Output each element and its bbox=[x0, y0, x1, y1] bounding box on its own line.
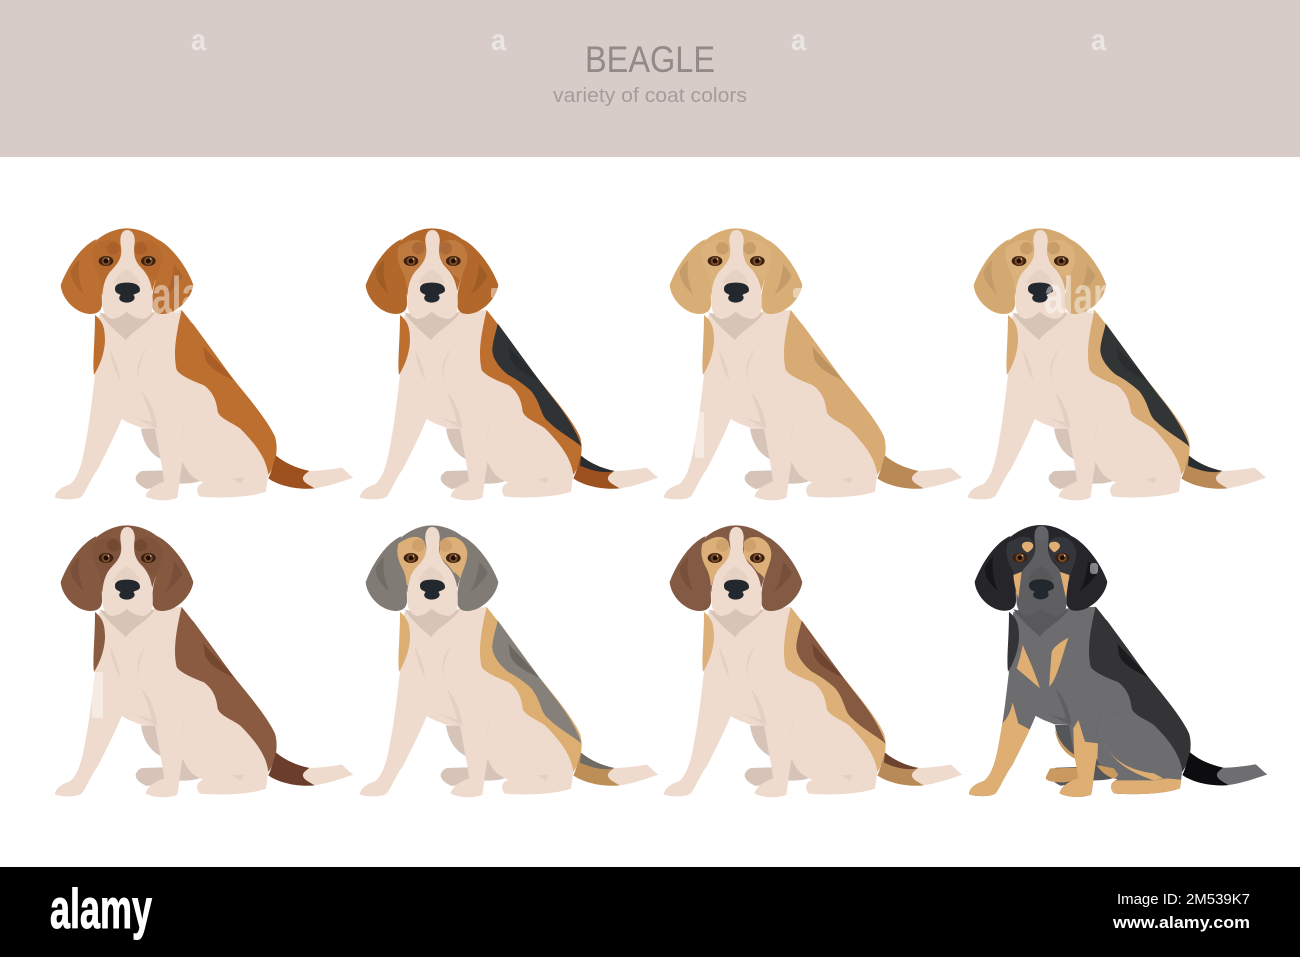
dog: lemon with black saddle bbox=[968, 228, 1266, 500]
image watermarks: alamy bbox=[152, 267, 252, 325]
header watermarks bbox=[191, 24, 1106, 57]
dog: red and white bbox=[55, 228, 353, 500]
tan chest and face markings bbox=[1013, 542, 1069, 688]
header watermarks: a bbox=[791, 24, 806, 57]
image id: Image ID: 2M539K7 bbox=[1117, 891, 1250, 908]
tan legs bbox=[964, 702, 1184, 802]
image watermarks: alamy bbox=[1044, 267, 1144, 325]
dog: liver and white bbox=[55, 525, 353, 797]
dog: lemon and white bbox=[664, 228, 962, 500]
dog: bluetick black and tan bbox=[964, 525, 1267, 802]
far paw tan bbox=[1046, 728, 1118, 782]
header band bbox=[0, 0, 1300, 157]
subtitle: variety of coat colors bbox=[553, 85, 747, 107]
dog: chocolate tricolor bbox=[664, 525, 962, 797]
header watermarks: a bbox=[191, 24, 206, 57]
title: BEAGLE bbox=[585, 39, 715, 80]
footer logo: alamy bbox=[50, 877, 152, 940]
image watermarks bbox=[92, 267, 1144, 718]
header watermarks: a bbox=[491, 24, 506, 57]
header watermarks: a bbox=[1091, 24, 1106, 57]
footer bar bbox=[0, 867, 1300, 957]
dog: lilac tricolor bbox=[360, 525, 658, 797]
dog: tricolor black saddle bbox=[360, 228, 658, 500]
website: www.alamy.com bbox=[1112, 913, 1250, 932]
